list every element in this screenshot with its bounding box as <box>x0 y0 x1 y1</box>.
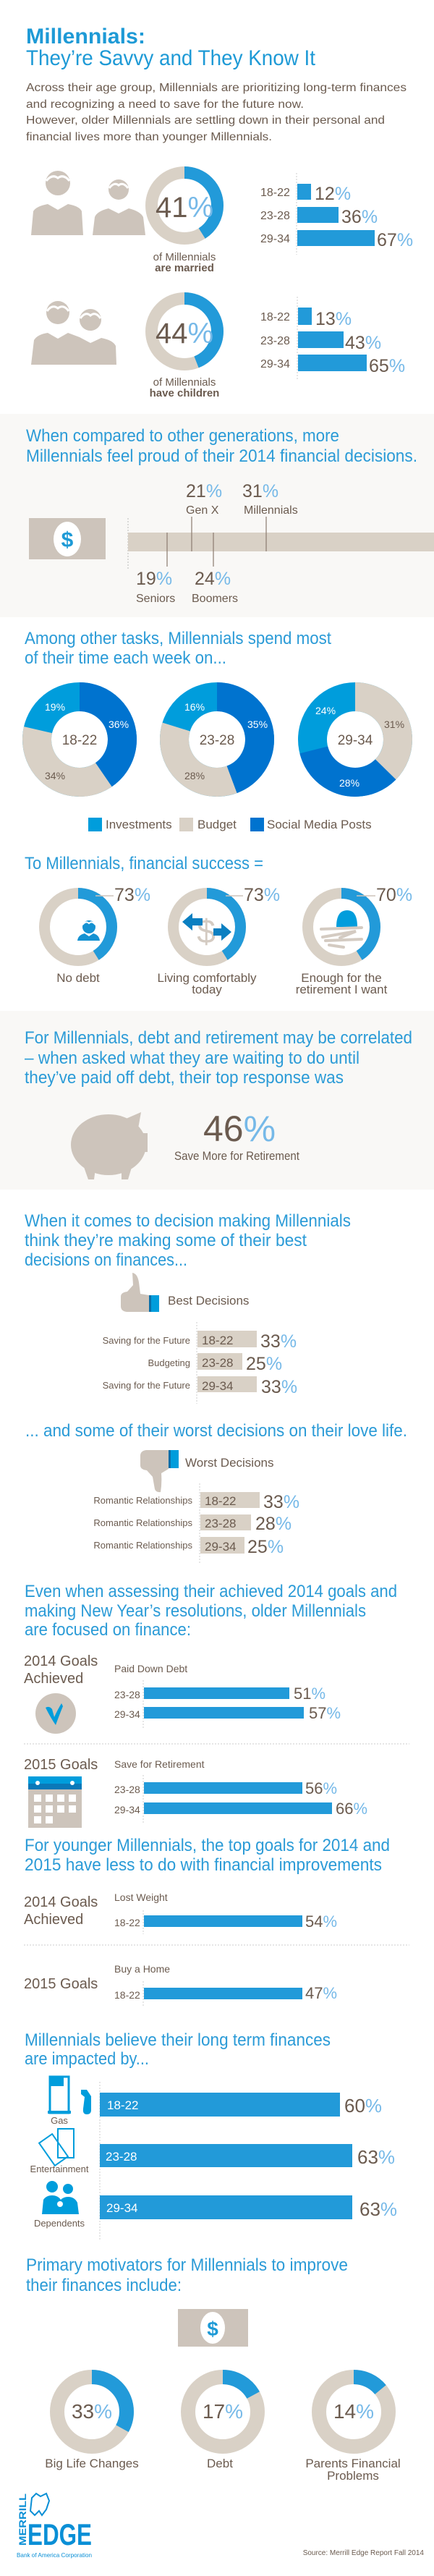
heading: proud: When compared to other generations, more <box>26 426 339 446</box>
donut: children 44%: have children <box>150 387 219 399</box>
donut chart: 23-28: 28% <box>184 770 205 781</box>
donut chart: 18-22: 34% <box>45 770 65 781</box>
heading: debt and retirement <box>25 1028 412 1088</box>
icon: thumbs up <box>121 1273 159 1312</box>
goals 2015 older: 66% <box>336 1800 367 1818</box>
icon: dollar bill <box>178 2309 248 2347</box>
donut: big life changes <box>45 2377 139 2470</box>
success donut: retirement: 70% <box>376 885 412 905</box>
icon: dollar with arrows <box>182 912 231 950</box>
legend <box>88 818 372 831</box>
goals 2014 older: Paid Down Debt <box>114 1663 187 1674</box>
donut chart: 23-28: 23-28 <box>200 733 234 748</box>
title: They’re Savvy and They Know It <box>26 46 316 70</box>
goals 2014 younger: 54% <box>305 1912 337 1931</box>
panel: proud of decisions <box>0 414 434 617</box>
icon: couple <box>31 171 145 235</box>
bar chart: worst decisions: 28% <box>255 1514 292 1534</box>
donut chart: 23-28: 16% <box>184 701 205 713</box>
bar chart: married by age: 23-28 <box>260 210 290 222</box>
heading: debt and retirement: they’ve paid off debt, their top response was <box>25 1068 344 1088</box>
goals 2015 older: 2015 Goals <box>24 1757 98 1773</box>
bar chart: best decisions: 33% <box>260 1331 297 1352</box>
stat: 46%: Save More for Retirement <box>174 1149 299 1163</box>
success donut: retirement <box>296 885 412 996</box>
generation timeline chart: Gen X <box>186 504 219 517</box>
heading: best decisions: decisions on finances... <box>25 1250 187 1270</box>
icon: person <box>77 920 100 941</box>
donut: big life changes: 33% <box>72 2400 112 2423</box>
bar chart: worst decisions: Romantic Relationships <box>93 1517 192 1528</box>
intro paragraph: financial lives more than younger Millennials. <box>26 131 272 143</box>
intro paragraph: and recognizing a need to save for the future now. <box>26 98 304 111</box>
donut chart: 29-34: 29-34 <box>338 733 373 748</box>
donut chart: 18-22: 19% <box>45 701 65 713</box>
donut: married 41%: of Millennials <box>153 251 216 263</box>
heading: long term finances: are impacted by... <box>25 2049 149 2069</box>
bar chart: worst decisions: 33% <box>263 1492 299 1512</box>
bar chart: worst decisions: 18-22 <box>205 1494 236 1508</box>
text: Best Decisions <box>168 1294 249 1308</box>
bar chart: children by age <box>260 297 405 380</box>
icon: nest egg <box>321 910 362 947</box>
goals 2015 younger: 2015 Goals <box>24 1976 98 1992</box>
heading: proud <box>26 426 417 466</box>
success donut: no debt: No debt <box>56 971 100 985</box>
donut chart: 29-34: 24% <box>315 705 336 716</box>
donut: parents financial problems <box>305 2377 401 2483</box>
success donut: retirement: retirement I want <box>296 983 388 996</box>
goals 2015 younger: 47% <box>305 1984 337 2002</box>
success donut: living comfortably <box>157 885 280 996</box>
goals 2015 younger: Buy a Home <box>114 1963 170 1975</box>
donut: big life changes: Big Life Changes <box>45 2457 139 2470</box>
bar chart: married by age: 36% <box>341 207 378 227</box>
heading: financial success: To Millennials, financial success = <box>25 854 263 873</box>
bar chart: married by age: 67% <box>377 230 413 250</box>
goals 2015 older: Save for Retirement <box>114 1758 205 1770</box>
goals 2014 older: 51% <box>294 1685 326 1703</box>
donut: parents financial problems: Problems <box>327 2469 379 2483</box>
bar chart: best decisions <box>103 1322 297 1404</box>
donut: married 41%: 41% <box>156 192 213 224</box>
donut chart: 18-22 <box>37 697 129 782</box>
success donut: living comfortably: Living comfortably <box>157 971 257 985</box>
heading: weekly time: of their time each week on... <box>25 648 226 668</box>
bar chart: children by age: 29-34 <box>260 358 290 370</box>
heading: older millennials goals: Even when assessing their achieved 2014 goals and <box>25 1582 397 1601</box>
stat: 46%: 46% <box>203 1109 276 1149</box>
heading: younger millennials goals: 2015 have less to do with financial improvements <box>25 1855 382 1875</box>
heading: older millennials goals: making New Year’s resolutions, older Millennials <box>25 1601 366 1621</box>
generation timeline chart: Millennials <box>244 504 298 517</box>
generation timeline chart <box>128 481 434 605</box>
bar chart: best decisions: 29-34 <box>202 1379 233 1393</box>
icon: dollar bill: $ <box>61 528 74 552</box>
bar chart: impacts: 63% <box>357 2146 395 2168</box>
legend: Budget <box>197 818 237 831</box>
bar chart: worst decisions: 29-34 <box>205 1540 236 1554</box>
bar chart: worst decisions <box>93 1483 299 1564</box>
legend: Investments <box>106 818 172 831</box>
donut chart: 29-34 <box>312 697 404 789</box>
heading: younger millennials goals: For younger Millennials, the top goals for 2014 and <box>25 1836 390 1855</box>
heading: weekly time: Among other tasks, Millennials spend most <box>25 629 331 648</box>
bar chart: best decisions: 23-28 <box>202 1356 233 1370</box>
bar chart: worst decisions: Romantic Relationships <box>93 1495 192 1506</box>
icon: gas pump <box>48 2077 91 2114</box>
goals 2014 younger: Achieved <box>24 1912 83 1928</box>
intro paragraph <box>26 82 407 143</box>
bar chart: impacts: 63% <box>359 2198 397 2220</box>
donut: married 41% <box>152 172 217 274</box>
heading: best decisions: think they’re making some of their best <box>25 1231 307 1250</box>
icon: dollar with arrows: $ <box>197 912 216 950</box>
generation timeline chart: 24% <box>195 569 231 589</box>
generation timeline chart: 19% <box>136 569 172 589</box>
bar chart: married by age: 29-34 <box>260 233 290 245</box>
donut: debt <box>188 2377 258 2470</box>
heading: long term finances: Millennials believe their long term finances <box>25 2030 331 2050</box>
heading: best decisions <box>25 1211 351 1270</box>
heading: debt and retirement: – when asked what they are waiting to do until <box>25 1048 359 1068</box>
goals 2014 older <box>24 1653 341 1734</box>
donut chart: 29-34: 28% <box>339 777 359 789</box>
goals 2014 younger: 18-22 <box>114 1917 140 1928</box>
bar chart: children by age: 18-22 <box>260 311 290 323</box>
logo: Merrill Edge <box>17 2493 92 2559</box>
bar chart: best decisions: 25% <box>246 1354 282 1374</box>
bar chart: best decisions: 18-22 <box>202 1334 233 1347</box>
heading: long term finances <box>25 2030 331 2069</box>
generation timeline chart: 21% <box>186 481 222 501</box>
donut: married 41%: are married <box>155 262 214 274</box>
success donut: no debt <box>45 885 150 985</box>
goals 2014 older: Achieved <box>24 1671 83 1687</box>
generation timeline chart: Seniors <box>136 593 175 605</box>
donut: children 44%: of Millennials <box>153 376 216 389</box>
bar chart: worst decisions: 23-28 <box>205 1517 236 1530</box>
heading: younger millennials goals <box>25 1836 390 1875</box>
bar chart: best decisions: 33% <box>261 1377 297 1397</box>
donut chart: 23-28 <box>174 697 268 782</box>
goals 2015 older: 23-28 <box>114 1784 140 1795</box>
heading: motivators <box>26 2255 348 2295</box>
text: Dependents <box>34 2218 85 2229</box>
donut chart: 18-22: 36% <box>109 719 129 730</box>
donut: children 44% <box>150 298 219 399</box>
icon: piggy bank <box>71 1112 148 1179</box>
legend: Social Media Posts <box>267 818 372 831</box>
goals 2015 younger: 18-22 <box>114 1989 140 2001</box>
bar chart: best decisions: Budgeting <box>148 1357 190 1368</box>
icon: dollar bill: $ <box>207 2318 218 2340</box>
bar chart: impacts: 18-22 <box>107 2098 138 2112</box>
heading: motivators: Primary motivators for Millennials to improve <box>26 2255 348 2275</box>
donut: debt: 17% <box>203 2400 243 2423</box>
bar chart: impacts: 23-28 <box>106 2150 137 2164</box>
goals 2014 younger: 2014 Goals <box>24 1894 98 1910</box>
goals 2015 younger <box>24 1963 337 2006</box>
success donut: living comfortably: 73% <box>244 885 280 905</box>
donut: parents financial problems: 14% <box>333 2400 374 2423</box>
bar chart: married by age <box>260 173 413 255</box>
donut chart: 29-34: 31% <box>384 719 404 730</box>
goals 2014 older: 29-34 <box>114 1708 140 1720</box>
donut: parents financial problems: Parents Financial <box>305 2457 401 2470</box>
goals 2014 younger: Lost Weight <box>114 1891 168 1903</box>
donut: debt: Debt <box>207 2457 233 2470</box>
donut chart: 23-28: 35% <box>247 719 268 730</box>
panel: debt and retirement <box>0 1011 434 1190</box>
title: Millennials: <box>26 25 145 48</box>
text: Entertainment <box>30 2164 89 2174</box>
bar chart: children by age: 13% <box>315 309 352 329</box>
bar chart: married by age: 18-22 <box>260 187 290 199</box>
icon: tickets <box>39 2129 74 2166</box>
bar chart: married by age: 12% <box>315 184 351 204</box>
icon: thumbs down <box>140 1450 179 1492</box>
heading: best decisions: When it comes to decision making Millennials <box>25 1211 351 1231</box>
goals 2014 younger <box>24 1891 337 1934</box>
heading: motivators: their finances include: <box>26 2276 182 2295</box>
bar chart: best decisions: Saving for the Future <box>103 1380 190 1391</box>
generation timeline chart: 31% <box>242 481 278 501</box>
icon: calendar <box>28 1776 82 1828</box>
success donut: retirement: Enough for the <box>301 971 382 985</box>
donut chart: 18-22: 18-22 <box>62 733 97 748</box>
source note: Source: Merrill Edge Report Fall 2014 <box>303 2549 424 2557</box>
bar chart: children by age: 65% <box>369 356 405 376</box>
goals 2015 older: 29-34 <box>114 1804 140 1816</box>
heading: worst decisions: ... and some of their worst decisions on their love life. <box>25 1421 407 1441</box>
heading: debt and retirement: For Millennials, debt and retirement may be correlated <box>25 1028 412 1048</box>
title <box>26 25 316 70</box>
goals 2014 older: 2014 Goals <box>24 1653 98 1669</box>
logo: Merrill Edge: MERRILL <box>17 2493 28 2546</box>
bar chart: impacts: 60% <box>344 2095 382 2117</box>
stat: 46% <box>174 1109 299 1163</box>
logo: Merrill Edge: EDGE <box>27 2517 92 2551</box>
icon: dollar bill <box>29 518 106 559</box>
icon: check circle <box>35 1693 76 1734</box>
text: Worst Decisions <box>185 1456 273 1470</box>
bar chart: impacts: 29-34 <box>106 2201 137 2215</box>
goals 2014 older: 57% <box>309 1704 341 1722</box>
success donut: living comfortably: today <box>192 983 222 996</box>
intro paragraph: However, older Millennials are settling down in their personal and <box>26 114 385 127</box>
icon: parents <box>31 301 116 365</box>
bar chart: worst decisions: Romantic Relationships <box>93 1540 192 1551</box>
heading: proud: Millennials feel proud of their 2014 financial decisions. <box>26 446 417 466</box>
bar chart: children by age: 23-28 <box>260 335 290 347</box>
heading: older millennials goals <box>25 1582 397 1640</box>
success donut: no debt: 73% <box>114 885 150 905</box>
bar chart: impacts <box>100 2082 397 2240</box>
bar chart: worst decisions: 25% <box>247 1537 284 1557</box>
goals 2015 older <box>24 1757 367 1828</box>
donut: children 44%: 44% <box>156 318 213 349</box>
bar chart: children by age: 43% <box>345 333 381 353</box>
intro paragraph: Across their age group, Millennials are prioritizing long-term finances <box>26 82 407 94</box>
goals 2015 older: 56% <box>305 1779 337 1797</box>
text: Gas <box>51 2115 68 2126</box>
logo: Merrill Edge: Bank of America Corporation <box>17 2551 92 2559</box>
generation timeline chart: Boomers <box>192 593 238 605</box>
icon: dependents <box>42 2181 79 2214</box>
bar chart: best decisions: Saving for the Future <box>103 1335 190 1346</box>
heading: older millennials goals: are focused on finance: <box>25 1620 191 1640</box>
heading: weekly time <box>25 629 331 668</box>
goals 2014 older: 23-28 <box>114 1689 140 1700</box>
